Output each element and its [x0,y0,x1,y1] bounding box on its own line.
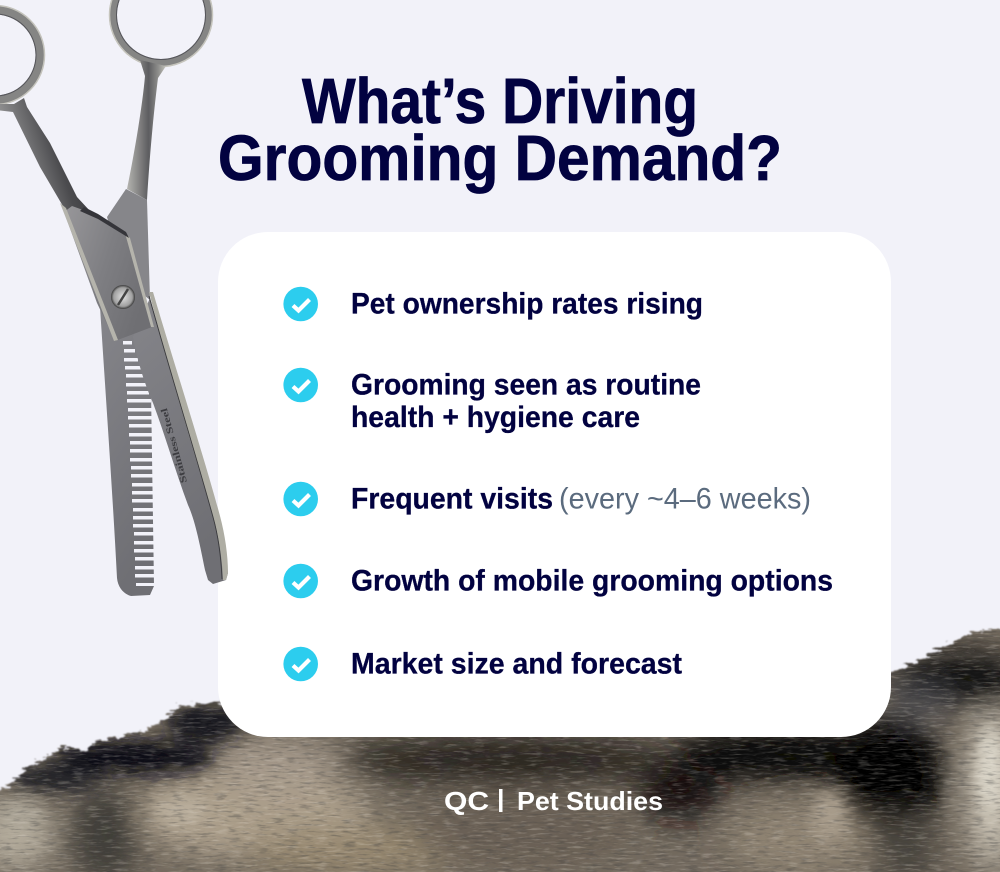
blade light edge [149,292,228,580]
logo: QC Pet Studies: QC [444,786,489,816]
solid blade [133,298,228,584]
item: routine health care [283,368,701,434]
item: pet ownership: Pet ownership rates rising [351,288,703,320]
logo: QC Pet Studies [444,786,663,816]
right shank [127,60,166,200]
item: routine health care: health + hygiene care [351,401,640,434]
title [218,65,782,194]
panel: checklist card [218,232,891,737]
item: frequent visits: Frequent visits [351,482,553,516]
item: market size: Market size and forecast [351,648,682,680]
right finger ring [110,0,212,66]
title: Grooming Demand? [218,122,782,194]
screw [111,285,135,309]
item: routine health care: Grooming seen as routine [351,368,701,402]
left finger ring [0,6,44,104]
logo: QC Pet Studies: Pet Studies [517,786,663,816]
engraved text: Stainless Steel [160,406,190,484]
blade dark line [149,296,222,579]
thinning blade [100,307,154,596]
left shank [0,98,90,227]
plate light edges [60,203,154,341]
plate top shadow [80,207,129,238]
item: mobile grooming: Growth of mobile grooming options [351,564,833,598]
item: frequent visits [283,482,811,516]
back plate [107,189,150,300]
image: dog fur [0,628,1000,872]
title: What’s Driving [302,65,698,137]
image: thinning scissors [0,0,228,596]
teeth gaps [123,341,155,586]
front plate [64,206,152,341]
item: frequent visits: (every ~4–6 weeks) [559,482,811,516]
